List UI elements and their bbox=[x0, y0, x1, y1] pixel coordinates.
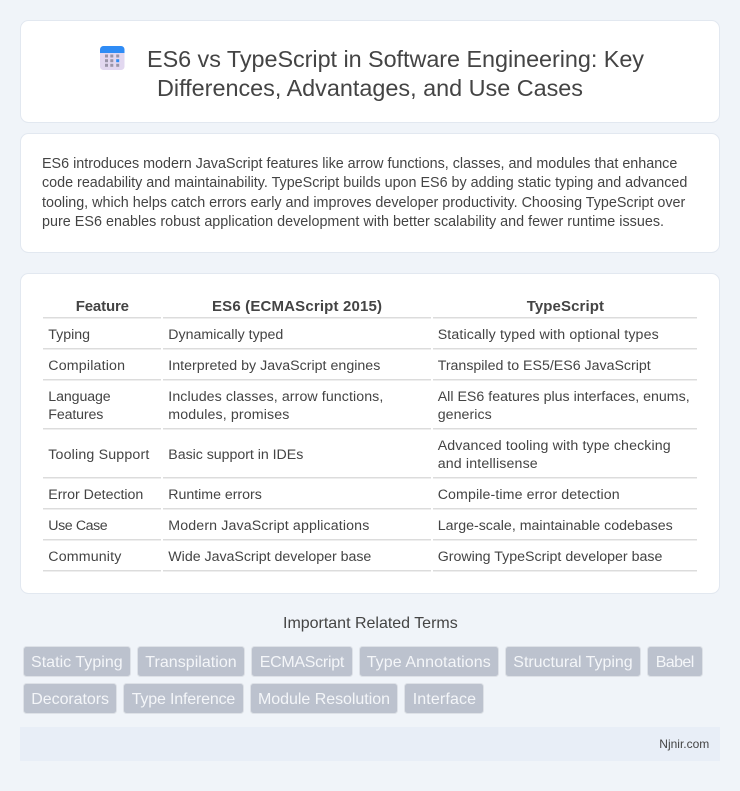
row: language features: generics bbox=[438, 407, 492, 423]
row: error detection bbox=[48, 487, 620, 503]
row: language features: modules, promises bbox=[168, 407, 289, 423]
icon: calendar grid bbox=[100, 46, 124, 70]
row: tooling support: and intellisense bbox=[438, 456, 538, 472]
intro text: ES6 introduces modern JavaScript features like arrow functions, classes, and modules that enhance bbox=[42, 156, 677, 172]
table header: Feature bbox=[76, 298, 129, 315]
row: community bbox=[48, 549, 663, 565]
tag: type annotations bbox=[360, 646, 498, 676]
tag: decorators bbox=[24, 684, 116, 714]
row: tooling support: Advanced tooling with type checking bbox=[438, 438, 671, 454]
tag: static typing: Static Typing bbox=[31, 654, 123, 671]
panel: introduction bbox=[20, 134, 720, 252]
row: tooling support: Basic support in IDEs bbox=[168, 447, 303, 463]
row: typing: Typing bbox=[48, 327, 90, 343]
row: use case: Use Case bbox=[48, 518, 108, 534]
row: error detection: Compile-time error detection bbox=[438, 487, 620, 503]
title: ES6 vs TypeScript in Software Engineering: Key bbox=[147, 46, 644, 72]
tag: decorators: Decorators bbox=[31, 691, 109, 708]
tag: type inference: Type Inference bbox=[132, 691, 235, 708]
tag: babel bbox=[648, 646, 702, 676]
row: language features bbox=[48, 389, 690, 423]
row: tooling support bbox=[48, 438, 671, 472]
row: compilation: Interpreted by JavaScript engines bbox=[168, 358, 380, 374]
tag: module resolution: Module Resolution bbox=[258, 691, 390, 708]
row: typing: Dynamically typed bbox=[168, 327, 283, 343]
tag: type annotations: Type Annotations bbox=[367, 654, 491, 671]
row: error detection: Error Detection bbox=[48, 487, 143, 503]
row: use case bbox=[48, 518, 673, 534]
row: tooling support: Tooling Support bbox=[48, 447, 149, 463]
row: compilation: Compilation bbox=[48, 358, 125, 374]
title: Differences, Advantages, and Use Cases bbox=[157, 75, 583, 101]
table header: TypeScript bbox=[527, 298, 604, 315]
intro text: tooling, which helps catch errors early and improves developer productivity. Choosing TypeScript over bbox=[42, 195, 686, 211]
tag: ecmascript: ECMAScript bbox=[260, 654, 345, 671]
footer credit: Njnir.com bbox=[659, 737, 709, 751]
tag: babel: Babel bbox=[656, 654, 694, 671]
row: language features: Language bbox=[48, 389, 111, 405]
row: error detection: Runtime errors bbox=[168, 487, 262, 503]
footer bar bbox=[20, 727, 720, 761]
row: community: Community bbox=[48, 549, 122, 565]
heading: important related terms: Important Related Terms bbox=[283, 615, 458, 632]
tag: transpilation bbox=[138, 646, 244, 676]
intro text: pure ES6 enables robust application development with better scalability and fewer runtime issues. bbox=[42, 214, 664, 230]
table header bbox=[76, 298, 604, 315]
row: language features: Includes classes, arrow functions, bbox=[168, 389, 383, 405]
tag: module resolution bbox=[250, 684, 398, 714]
row: compilation: Transpiled to ES5/ES6 JavaScript bbox=[438, 358, 651, 374]
row: typing: Statically typed with optional types bbox=[438, 327, 659, 343]
row: use case: Modern JavaScript applications bbox=[168, 518, 369, 534]
panel: comparison table bbox=[20, 274, 720, 594]
row: community: Wide JavaScript developer base bbox=[168, 549, 371, 565]
table header: ES6 (ECMAScript 2015) bbox=[212, 298, 382, 315]
title bbox=[147, 46, 644, 101]
tag: transpilation: Transpilation bbox=[145, 654, 237, 671]
row: community: Growing TypeScript developer base bbox=[438, 549, 663, 565]
row: language features: Features bbox=[48, 407, 103, 423]
panel: title card bbox=[20, 20, 720, 122]
intro text: code readability and maintainability. TypeScript builds upon ES6 by adding static typing and advanced bbox=[42, 175, 687, 191]
tag: ecmascript bbox=[252, 646, 352, 676]
tag: type inference bbox=[124, 684, 244, 714]
row: use case: Large-scale, maintainable codebases bbox=[438, 518, 673, 534]
intro text bbox=[42, 156, 687, 230]
tag: interface bbox=[404, 684, 484, 714]
row: language features: All ES6 features plus interfaces, enums, bbox=[438, 389, 690, 405]
row: typing bbox=[48, 327, 659, 343]
tag: interface: Interface bbox=[413, 691, 476, 708]
tags: related terms bbox=[24, 646, 702, 714]
tag: static typing bbox=[24, 646, 130, 676]
tag: structural typing bbox=[506, 646, 640, 676]
row: compilation bbox=[48, 358, 651, 374]
tag: structural typing: Structural Typing bbox=[513, 654, 633, 671]
